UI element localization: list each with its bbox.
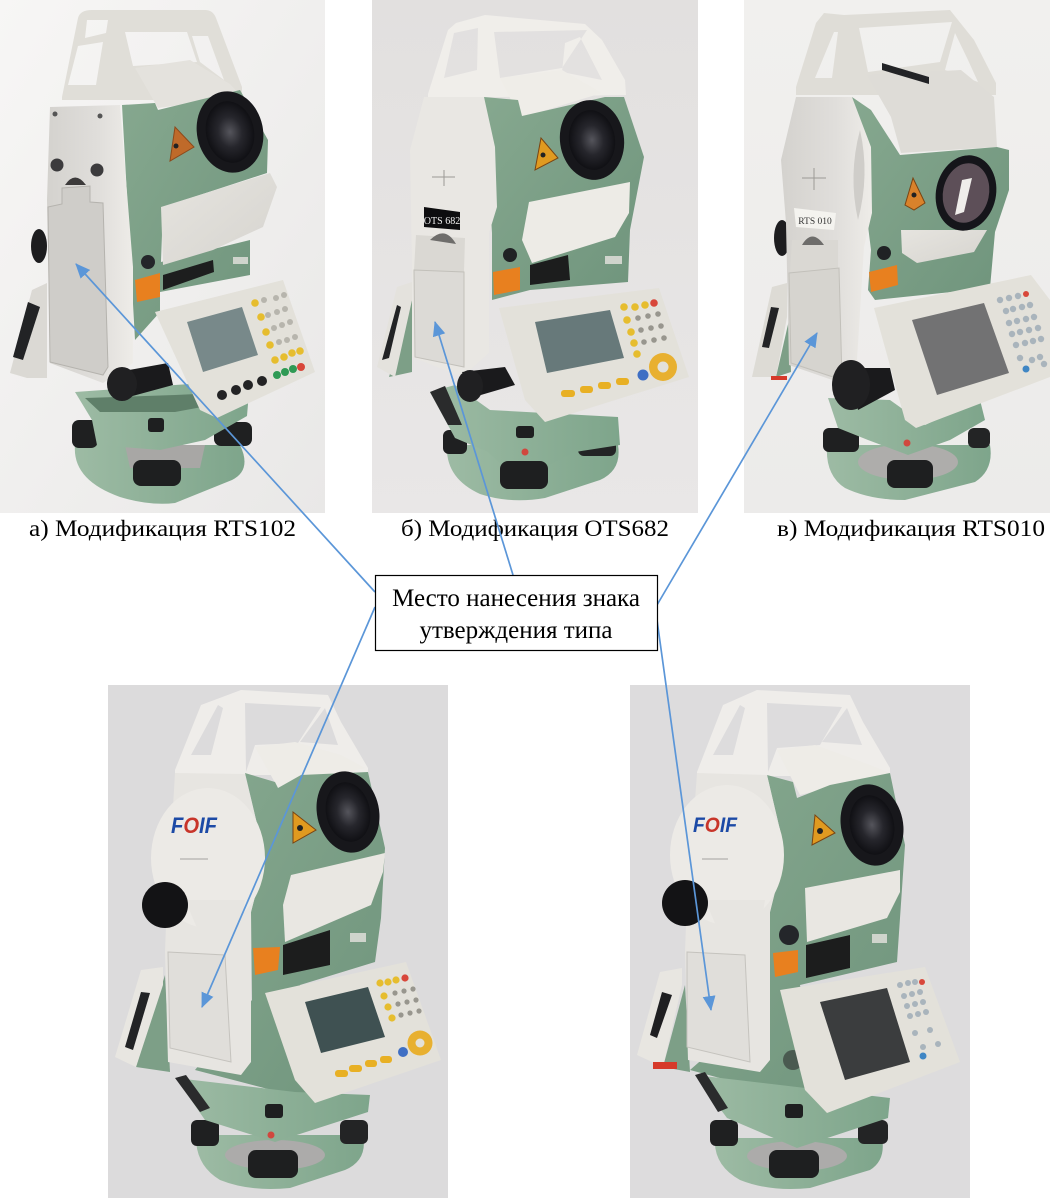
instrument: handle bbox=[428, 15, 626, 97]
panel: lower left photo bbox=[108, 685, 448, 1198]
arrow: callout to RTS010 bbox=[657, 333, 817, 605]
instrument: body and disc bbox=[151, 773, 265, 1075]
arrow: callout to lower left bbox=[202, 607, 375, 1007]
instrument: knob behind body bbox=[774, 220, 790, 256]
panel: modification RTS010 photo bbox=[744, 0, 1050, 513]
caption a: а) Модификация RTS102 bbox=[29, 516, 296, 541]
instrument: display unit bbox=[265, 962, 441, 1103]
caption c: в) Модификация RTS010 bbox=[777, 516, 1045, 541]
instrument: handle bbox=[796, 10, 996, 95]
panel: modification OTS682 photo bbox=[372, 0, 698, 513]
instrument: side cover bbox=[410, 97, 497, 377]
instrument: focus knob bbox=[832, 360, 895, 410]
instrument: side module bbox=[637, 968, 682, 1069]
instrument: side cover bbox=[47, 105, 133, 383]
panel: lower right photo bbox=[630, 685, 970, 1198]
instrument: green wedge behind module bbox=[389, 300, 412, 377]
instrument: green wedge behind module bbox=[776, 320, 791, 377]
instrument: side module bbox=[10, 283, 47, 378]
arrow: callout to RTS102 bbox=[76, 264, 375, 592]
instrument: base bbox=[823, 398, 991, 500]
instrument: focus knob bbox=[457, 367, 515, 402]
instrument: side cover bbox=[781, 97, 872, 383]
instrument: handle bbox=[175, 690, 368, 775]
instrument: side module bbox=[752, 283, 787, 380]
instrument: display unit bbox=[499, 288, 689, 422]
instrument: telescope head bbox=[122, 60, 277, 340]
instrument: knob behind body bbox=[31, 229, 47, 263]
instrument: base bbox=[695, 1072, 890, 1189]
label plate RTS 010 bbox=[794, 208, 836, 230]
instrument: side module bbox=[377, 282, 412, 377]
instrument: telescope head bbox=[690, 745, 911, 1105]
instrument: focus knob bbox=[142, 882, 188, 928]
instrument: telescope head bbox=[195, 742, 387, 1100]
instrument: telescope head bbox=[852, 63, 1009, 300]
instrument: focus knob bbox=[107, 363, 173, 401]
arrow: callout to OTS682 bbox=[435, 322, 513, 575]
panel: modification RTS102 photo bbox=[0, 0, 325, 513]
logo FOIF: FOIF bbox=[171, 813, 218, 838]
arrow: callout to lower right bbox=[657, 620, 711, 1010]
instrument: telescope head bbox=[484, 70, 644, 300]
caption b: б) Модификация OTS682 bbox=[401, 516, 669, 541]
instrument: display unit bbox=[780, 967, 960, 1113]
label plate RTS 010: RTS 010 bbox=[798, 217, 832, 227]
instrument: handle bbox=[697, 690, 890, 776]
instrument: side cover bbox=[168, 952, 231, 1062]
instrument: green wedge behind module bbox=[663, 985, 690, 1072]
instrument: display unit bbox=[874, 275, 1050, 428]
instrument: focus knob bbox=[662, 880, 708, 926]
instrument: side cover bbox=[687, 952, 750, 1062]
instrument: side module bbox=[115, 967, 163, 1067]
logo FOIF: FOIF bbox=[693, 814, 738, 837]
callout: Место нанесения знака bbox=[392, 585, 640, 612]
callout bbox=[376, 576, 658, 650]
instrument: body and disc bbox=[670, 773, 784, 1072]
instrument: base bbox=[175, 1075, 370, 1189]
instrument: handle bbox=[62, 10, 242, 100]
callout: утверждения типа bbox=[419, 617, 613, 644]
label plate OTS 682 bbox=[424, 207, 460, 230]
instrument: display unit bbox=[155, 280, 315, 418]
instrument: base bbox=[430, 385, 620, 500]
instrument: green wedge behind module bbox=[136, 975, 170, 1072]
instrument: base bbox=[72, 380, 252, 504]
label plate OTS 682: OTS 682 bbox=[424, 216, 460, 227]
